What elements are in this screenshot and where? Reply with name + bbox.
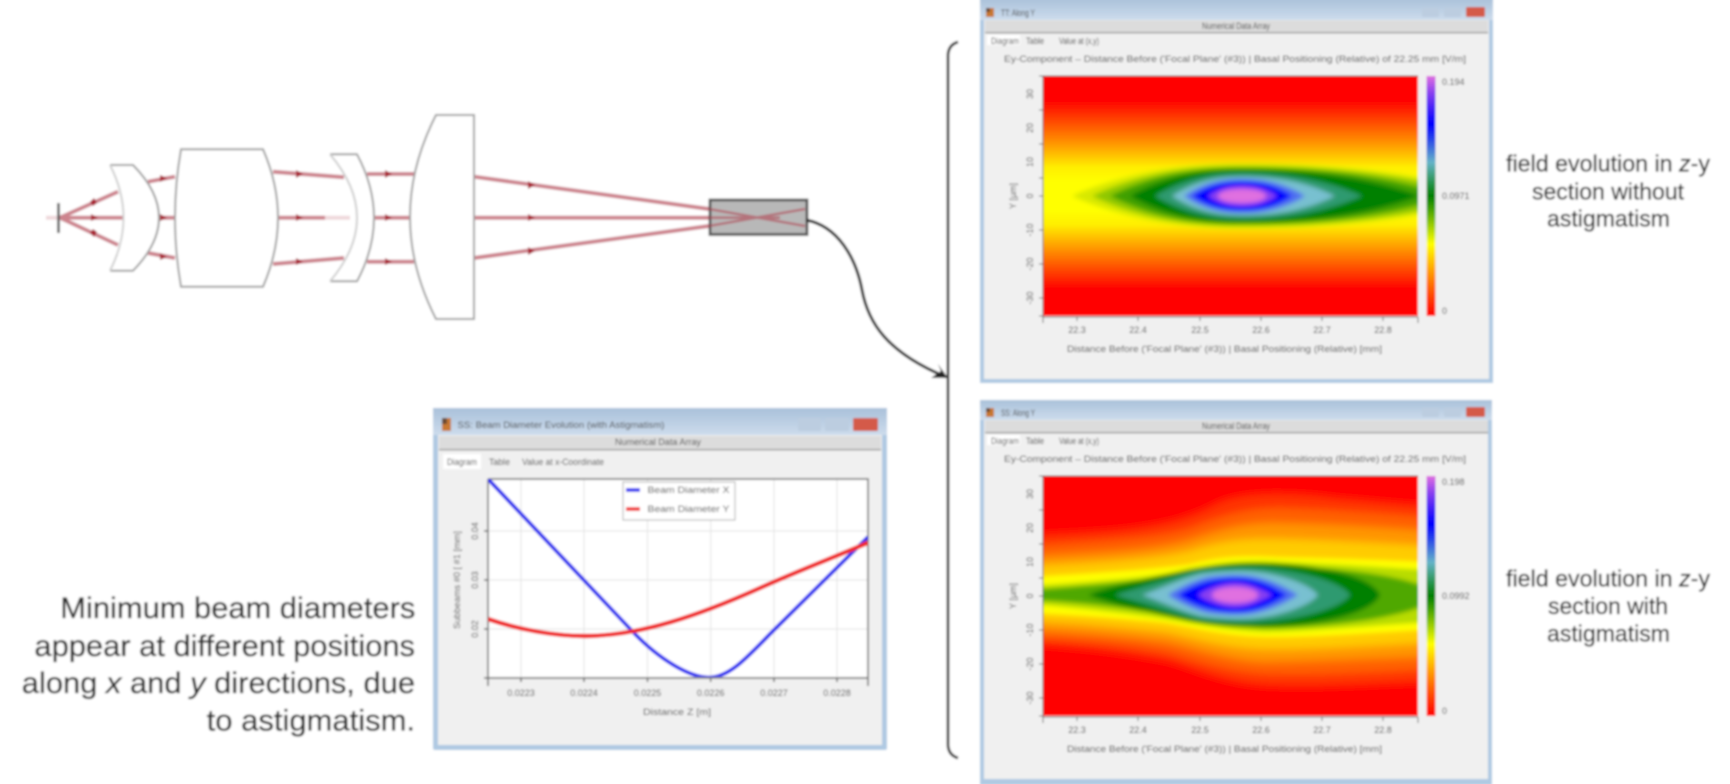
- x axis label: Distance Before ('Focal Plane' (#3)) | Basal Positioning (Relative) [mm]: [1067, 744, 1382, 754]
- lens 3: [330, 154, 374, 281]
- tabs: Value at x-Coordinate: [522, 457, 604, 467]
- window buttons: [798, 418, 878, 431]
- y tick labels: -20: [1025, 257, 1035, 271]
- x tick labels: 22.5: [1191, 725, 1209, 735]
- y tick labels: 0: [1025, 593, 1035, 599]
- x tick labels: 22.6: [1252, 725, 1270, 735]
- y tick labels: 0.02: [470, 620, 480, 638]
- tabs: Table: [1026, 36, 1044, 46]
- brace: [948, 42, 958, 758]
- y tick labels: 10: [1025, 157, 1035, 167]
- plot title: Ey-Component – Distance Before ('Focal Plane' (#3)) | Basal Positioning (Relative) of 22.25 mm [V/m]: [1004, 454, 1466, 464]
- x tick labels: 22.3: [1068, 725, 1086, 735]
- x axis label: Distance Before ('Focal Plane' (#3)) | Basal Positioning (Relative) [mm]: [1067, 344, 1382, 354]
- x tick labels: 0.0223: [507, 688, 535, 698]
- window buttons: [1422, 7, 1485, 17]
- caption: without astigmatism: section without: [1532, 178, 1684, 204]
- x tick labels: 0.0225: [634, 688, 661, 698]
- tabs: Value at (x,y): [1059, 36, 1099, 46]
- y tick labels: 0.03: [470, 571, 480, 589]
- x tick labels: 22.6: [1252, 325, 1270, 335]
- y tick labels: -10: [1025, 623, 1035, 637]
- ray direction markers: [90, 170, 535, 265]
- rays inside focal box: [709, 209, 805, 226]
- window: beam diameter evolution: [433, 408, 887, 750]
- colour bar: 0: [1442, 306, 1447, 316]
- x tick labels: 22.4: [1129, 325, 1147, 335]
- explanation text: along x and y directions, due: [22, 667, 415, 700]
- caption: with astigmatism: [1506, 566, 1710, 647]
- legend: [623, 482, 735, 520]
- colour bar: [1426, 476, 1470, 716]
- window header: Numerical Data Array: [615, 437, 701, 447]
- x tick labels: 22.5: [1191, 325, 1209, 335]
- x tick labels: 22.4: [1129, 725, 1147, 735]
- y tick labels: -30: [1025, 291, 1035, 305]
- y tick labels: 20: [1025, 123, 1035, 133]
- window: field evolution with astigmatism: [980, 400, 1492, 784]
- legend: Beam Diameter Y: [648, 504, 730, 514]
- caption: without astigmatism: [1506, 151, 1710, 232]
- x tick labels: 22.8: [1374, 325, 1392, 335]
- y axis label: Y [µm]: [1008, 183, 1018, 209]
- connector curve with arrow: [806, 220, 948, 378]
- y axis label: Subbeams #0 [ #1 [mm]: [452, 531, 462, 629]
- x tick labels: 0.0227: [760, 688, 788, 698]
- explanation text: Minimum beam diameters: [60, 592, 415, 625]
- window icon and title: TT: Along Y: [1001, 8, 1035, 18]
- x tick labels: [507, 688, 851, 698]
- y tick labels: [1025, 89, 1035, 305]
- y tick labels: 30: [1025, 89, 1035, 99]
- x tick labels: 0.0228: [823, 688, 851, 698]
- window buttons: [1422, 407, 1485, 417]
- faint ray extension behind source: [46, 216, 350, 220]
- y axis label: Y [µm]: [1008, 583, 1018, 609]
- axes and ticks: [1039, 76, 1418, 323]
- caption: without astigmatism: astigmatism: [1547, 206, 1670, 232]
- tabs: [991, 36, 1099, 46]
- focal region box: [710, 200, 807, 234]
- tabs: [447, 457, 604, 467]
- tabs: Diagram: [991, 436, 1019, 446]
- x axis label: Distance Z [m]: [643, 707, 711, 717]
- y tick labels: -10: [1025, 223, 1035, 237]
- light rays: [60, 172, 709, 264]
- colour bar: 0.198: [1442, 477, 1465, 487]
- window icon and title: SS: Along Y: [1001, 408, 1035, 418]
- caption: with astigmatism: section with: [1548, 593, 1668, 619]
- window icon and title: [986, 408, 1035, 418]
- colour bar: 0.194: [1442, 77, 1465, 87]
- x tick labels: [1068, 325, 1392, 335]
- window icon and title: [442, 418, 664, 431]
- y tick labels: 30: [1025, 489, 1035, 499]
- heatmap without astigmatism: [1042, 75, 1420, 318]
- caption: without astigmatism: field evolution in z-y: [1506, 151, 1710, 177]
- window header: Numerical Data Array: [1202, 21, 1270, 31]
- source plane: [57, 203, 60, 233]
- y tick labels: 0: [1025, 193, 1035, 199]
- x tick labels: 22.3: [1068, 325, 1086, 335]
- caption: with astigmatism: field evolution in z-y: [1506, 566, 1710, 592]
- tabs: Table: [489, 457, 510, 467]
- heatmap with astigmatism: [1030, 476, 1440, 716]
- window icon and title: [986, 8, 1035, 18]
- lens 4: [410, 115, 474, 319]
- lens 1: [110, 165, 159, 271]
- series: beam diameter x: [488, 479, 868, 678]
- window header: Numerical Data Array: [1202, 421, 1270, 431]
- legend: Beam Diameter X: [648, 485, 730, 495]
- axes and ticks: [1039, 476, 1418, 723]
- x tick labels: 22.8: [1374, 725, 1392, 735]
- explanation text: to astigmatism.: [207, 705, 415, 738]
- tabs: Table: [1026, 436, 1044, 446]
- y tick labels: 20: [1025, 523, 1035, 533]
- x tick labels: [1068, 725, 1392, 735]
- y tick labels: 0.04: [470, 522, 480, 540]
- explanation text: [22, 592, 415, 738]
- explanation text: appear at different positions: [34, 630, 415, 663]
- tabs: Diagram: [991, 36, 1019, 46]
- x tick labels: 22.7: [1313, 725, 1331, 735]
- window: field evolution without astigmatism: [980, 0, 1500, 383]
- lens 2: [175, 149, 278, 287]
- y tick labels: [470, 522, 480, 638]
- caption: with astigmatism: astigmatism: [1547, 621, 1670, 647]
- x tick labels: 0.0224: [570, 688, 598, 698]
- x tick labels: 0.0226: [697, 688, 724, 698]
- colour bar: [1426, 76, 1470, 316]
- optical system diagram: [46, 115, 807, 319]
- tabs: [991, 436, 1099, 446]
- tabs: Diagram: [447, 457, 477, 467]
- y tick labels: [1025, 489, 1035, 705]
- plot title: Ey-Component – Distance Before ('Focal Plane' (#3)) | Basal Positioning (Relative) of 22.25 mm [V/m]: [1004, 54, 1466, 64]
- y tick labels: 10: [1025, 557, 1035, 567]
- colour bar: 0.0992: [1442, 591, 1470, 601]
- colour bar: 0: [1442, 706, 1447, 716]
- tabs: Value at (x,y): [1059, 436, 1099, 446]
- colour bar: 0.0971: [1442, 191, 1470, 201]
- series: beam diameter y: [488, 543, 868, 636]
- y tick labels: -20: [1025, 657, 1035, 671]
- x tick labels: 22.7: [1313, 325, 1331, 335]
- line chart: [452, 479, 868, 717]
- window icon and title: SS: Beam Diameter Evolution (with Astigmatism): [458, 420, 664, 430]
- y tick labels: -30: [1025, 691, 1035, 705]
